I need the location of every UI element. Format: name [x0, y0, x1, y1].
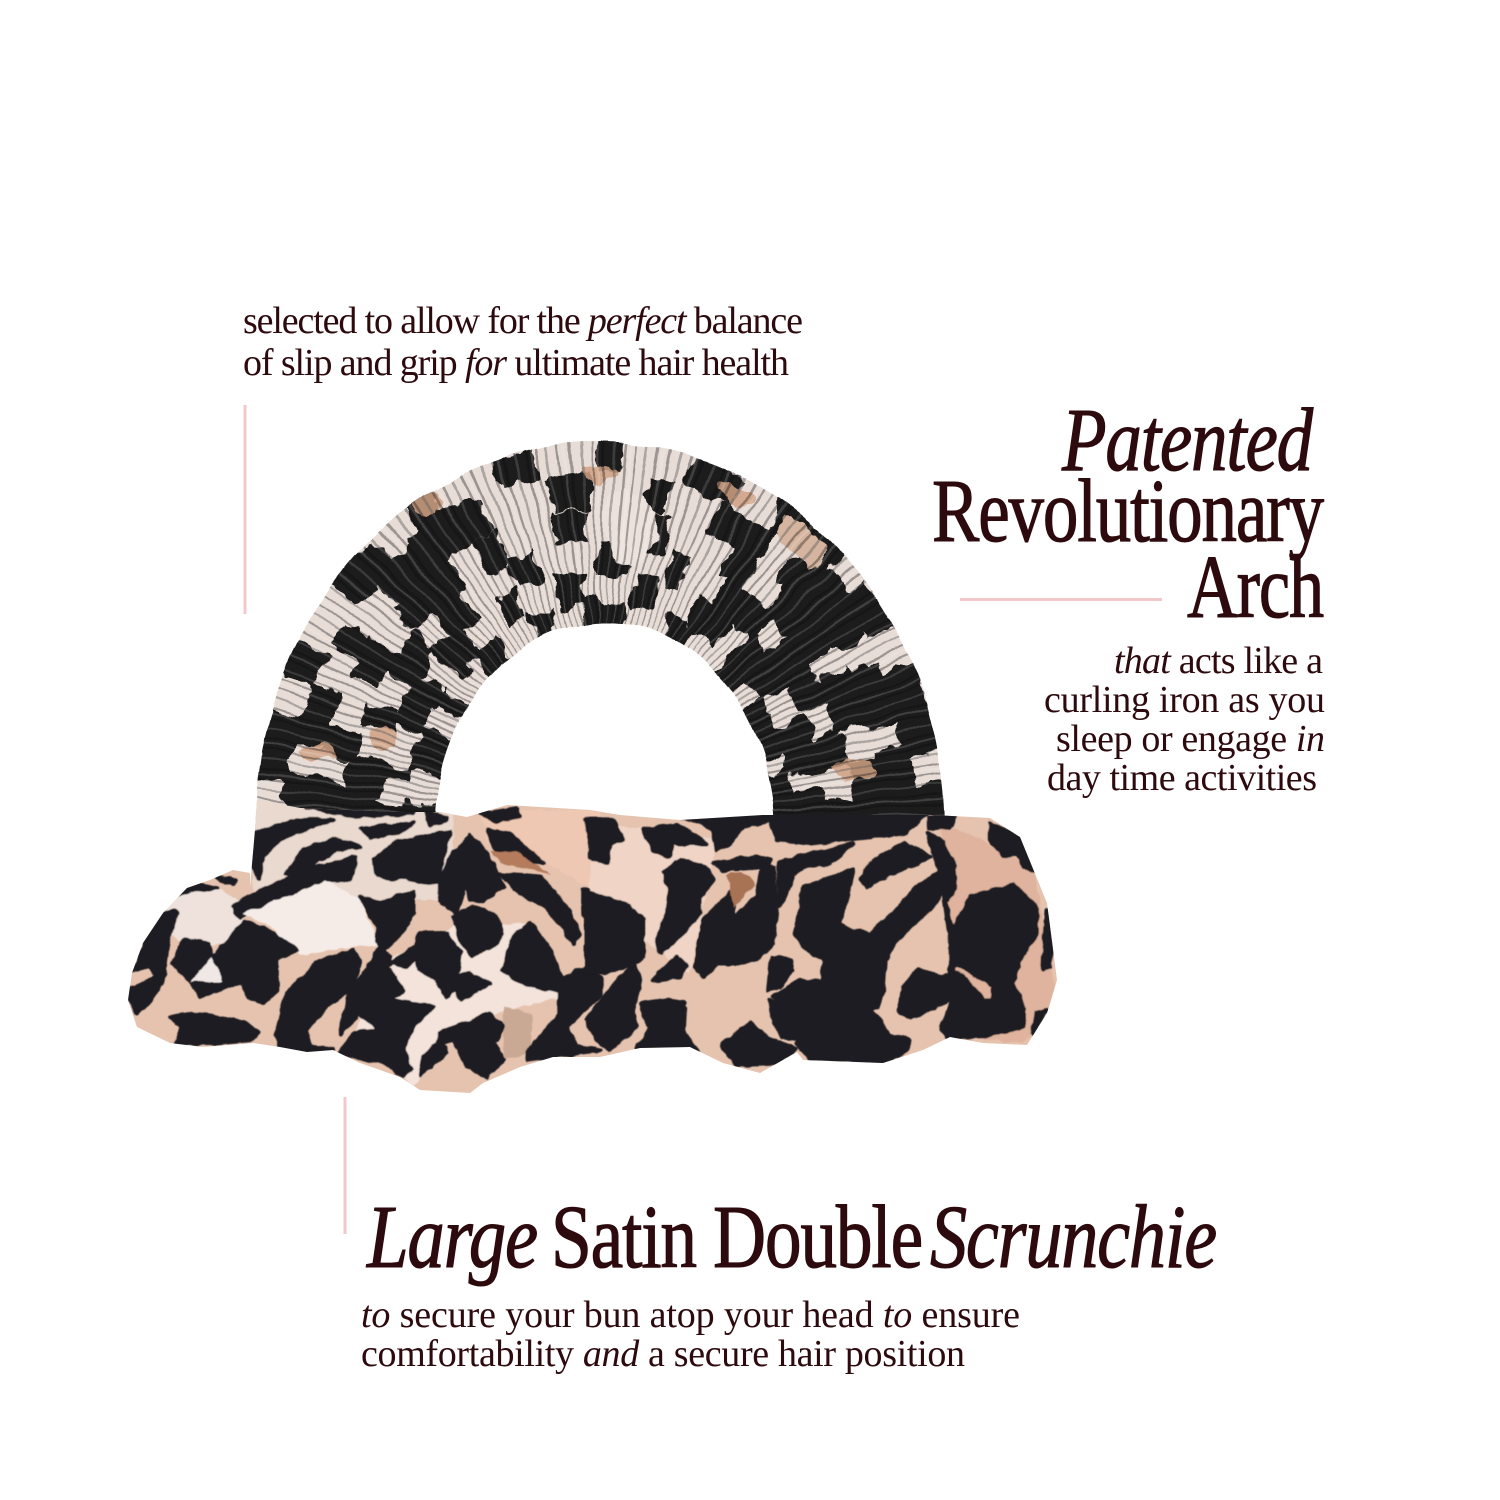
- title: Patented Revolutionary Arch: Arch: [1187, 538, 1323, 637]
- text: curling iron description: day time activities: [1047, 757, 1317, 799]
- title: Large Satin Double Scrunchie: Scrunchie: [930, 1188, 1216, 1287]
- text: slip and grip description: of slip and grip for ultimate hair health: [243, 342, 789, 384]
- divider: left vertical line: [244, 405, 246, 614]
- title: Patented Revolutionary Arch: Revolutionary: [932, 462, 1324, 561]
- scrunchie: left half print: [128, 800, 600, 1087]
- title: Large Satin Double Scrunchie: Large: [365, 1188, 537, 1287]
- illustration: leopard arch with scrunchie: [120, 430, 1065, 1100]
- text: scrunchie description: [361, 1294, 1020, 1375]
- text: curling iron description: [1044, 640, 1325, 799]
- title: Patented Revolutionary Arch: [932, 391, 1324, 637]
- text: curling iron description: that acts like a: [1114, 640, 1323, 682]
- text: slip and grip description: selected to allow for the perfect balance: [243, 300, 803, 342]
- title: Large Satin Double Scrunchie: [365, 1188, 1216, 1287]
- arch: ruched leopard satin: [256, 440, 945, 820]
- text: curling iron description: curling iron as you: [1044, 679, 1325, 721]
- text: scrunchie description: comfortability and a secure hair position: [361, 1333, 965, 1375]
- title: Patented Revolutionary Arch: Patented: [1061, 391, 1314, 490]
- scrunchie: large leopard satin: [120, 790, 1065, 1100]
- title: Large Satin Double Scrunchie: Satin Double: [551, 1188, 922, 1287]
- text: scrunchie description: to secure your bun atop your head to ensure: [361, 1294, 1020, 1336]
- divider: lower vertical line: [344, 1097, 346, 1234]
- text: slip and grip description: [243, 300, 803, 384]
- text: curling iron description: sleep or engage in: [1056, 718, 1325, 760]
- divider: horizontal line: [960, 598, 1162, 601]
- scrunchie: right half print: [587, 810, 1057, 1065]
